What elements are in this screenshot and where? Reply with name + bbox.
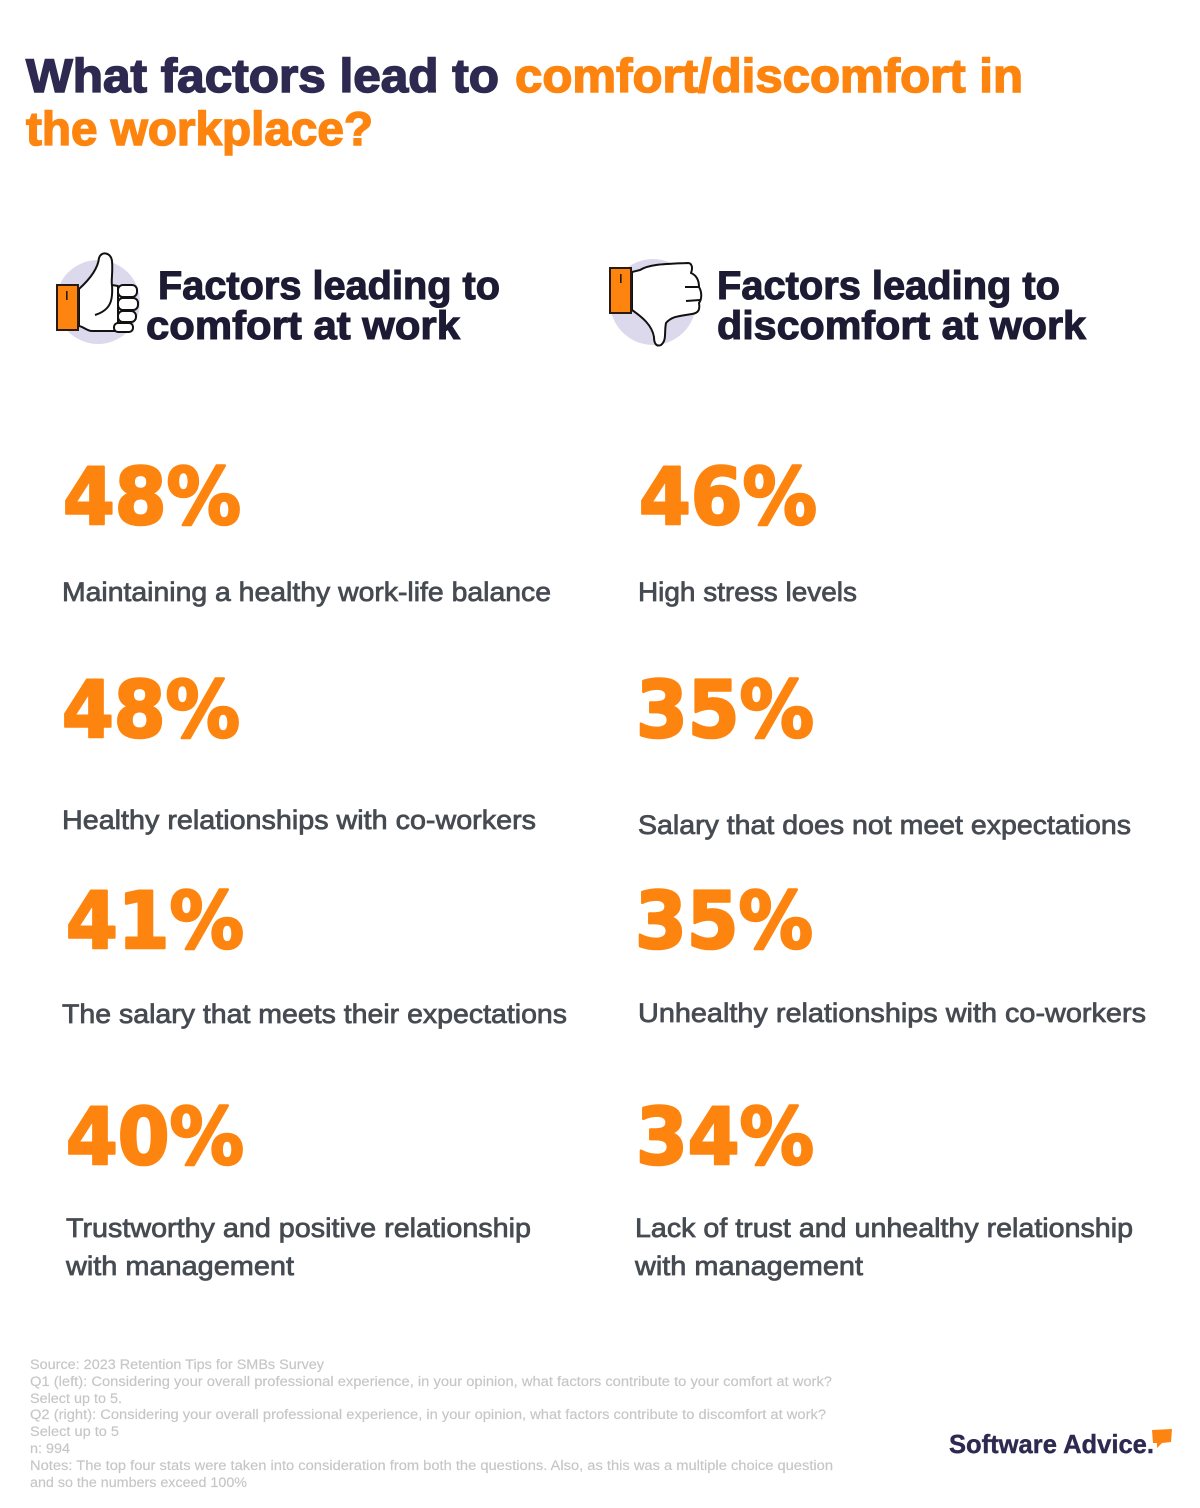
stat: 34% management (634, 1093, 1133, 1281)
source notes: Notes: The top four stats were taken into consideration from both the questions. Also, as this was a multiple choice question (30, 1458, 833, 1473)
stat: 35% salary: Salary that does not meet expectations (638, 810, 1131, 840)
stat: 48% work-life balance: Maintaining a healthy work-life balance (62, 577, 551, 607)
stat: 48% co-workers (62, 666, 536, 835)
stat: 48% work-life balance: 48% (63, 453, 241, 543)
source notes: and so the numbers exceed 100% (30, 1475, 247, 1490)
stat: 41% salary (62, 877, 567, 1029)
icon: thumbs down (610, 259, 701, 346)
heading: comfort (146, 264, 500, 348)
stat: 34% management: 34% (636, 1093, 814, 1183)
stat: 40% management: 40% (66, 1093, 244, 1183)
title: comfort/discomfort in (515, 49, 1023, 102)
stat: 40% management: Trustworthy and positive relationship (66, 1213, 531, 1243)
source notes (30, 1357, 833, 1490)
source notes: Select up to 5. (30, 1391, 122, 1406)
source notes: Q1 (left): Considering your overall professional experience, in your opinion, what factors contribute to your comfort at work? (30, 1374, 832, 1389)
source notes: Q2 (right): Considering your overall professional experience, in your opinion, what factors contribute to discomfort at work? (30, 1407, 826, 1422)
icon: thumbs up (56, 253, 140, 344)
stat: 35% unhealthy relationships (635, 877, 1146, 1028)
stat: 34% management: Lack of trust and unhealthy relationship (635, 1213, 1133, 1243)
source notes: n: 994 (30, 1441, 71, 1456)
logo: Software Advice: Software Advice. (949, 1429, 1154, 1459)
source notes: Source: 2023 Retention Tips for SMBs Survey (30, 1357, 324, 1372)
stat: 35% salary: 35% (636, 666, 814, 756)
source notes: Select up to 5 (30, 1424, 119, 1439)
stat: 35% unhealthy relationships: 35% (635, 877, 813, 967)
stat: 48% co-workers: 48% (62, 666, 240, 756)
stat: 41% salary: 41% (66, 877, 244, 967)
stat: 46% high stress: High stress levels (638, 577, 857, 607)
stat: 46% high stress: 46% (639, 453, 817, 543)
heading: comfort: Factors leading to (158, 264, 500, 308)
stat: 40% management (65, 1093, 531, 1281)
title (26, 49, 1023, 155)
title: What factors lead to (26, 49, 499, 102)
title: the workplace? (26, 102, 373, 155)
stat: 48% work-life balance (62, 453, 551, 607)
heading: discomfort: discomfort at work (717, 304, 1086, 348)
stat: 40% management: with management (65, 1251, 295, 1281)
stat: 46% high stress (638, 453, 857, 607)
stat: 35% salary (636, 666, 1131, 840)
heading: comfort: comfort at work (146, 304, 460, 348)
stat: 34% management: with management (634, 1251, 864, 1281)
heading: discomfort (717, 264, 1086, 348)
heading: discomfort: Factors leading to (717, 264, 1060, 308)
stat: 41% salary: The salary that meets their expectations (62, 999, 567, 1029)
stat: 35% unhealthy relationships: Unhealthy relationships with co-workers (638, 998, 1146, 1028)
stat: 48% co-workers: Healthy relationships with co-workers (62, 805, 536, 835)
